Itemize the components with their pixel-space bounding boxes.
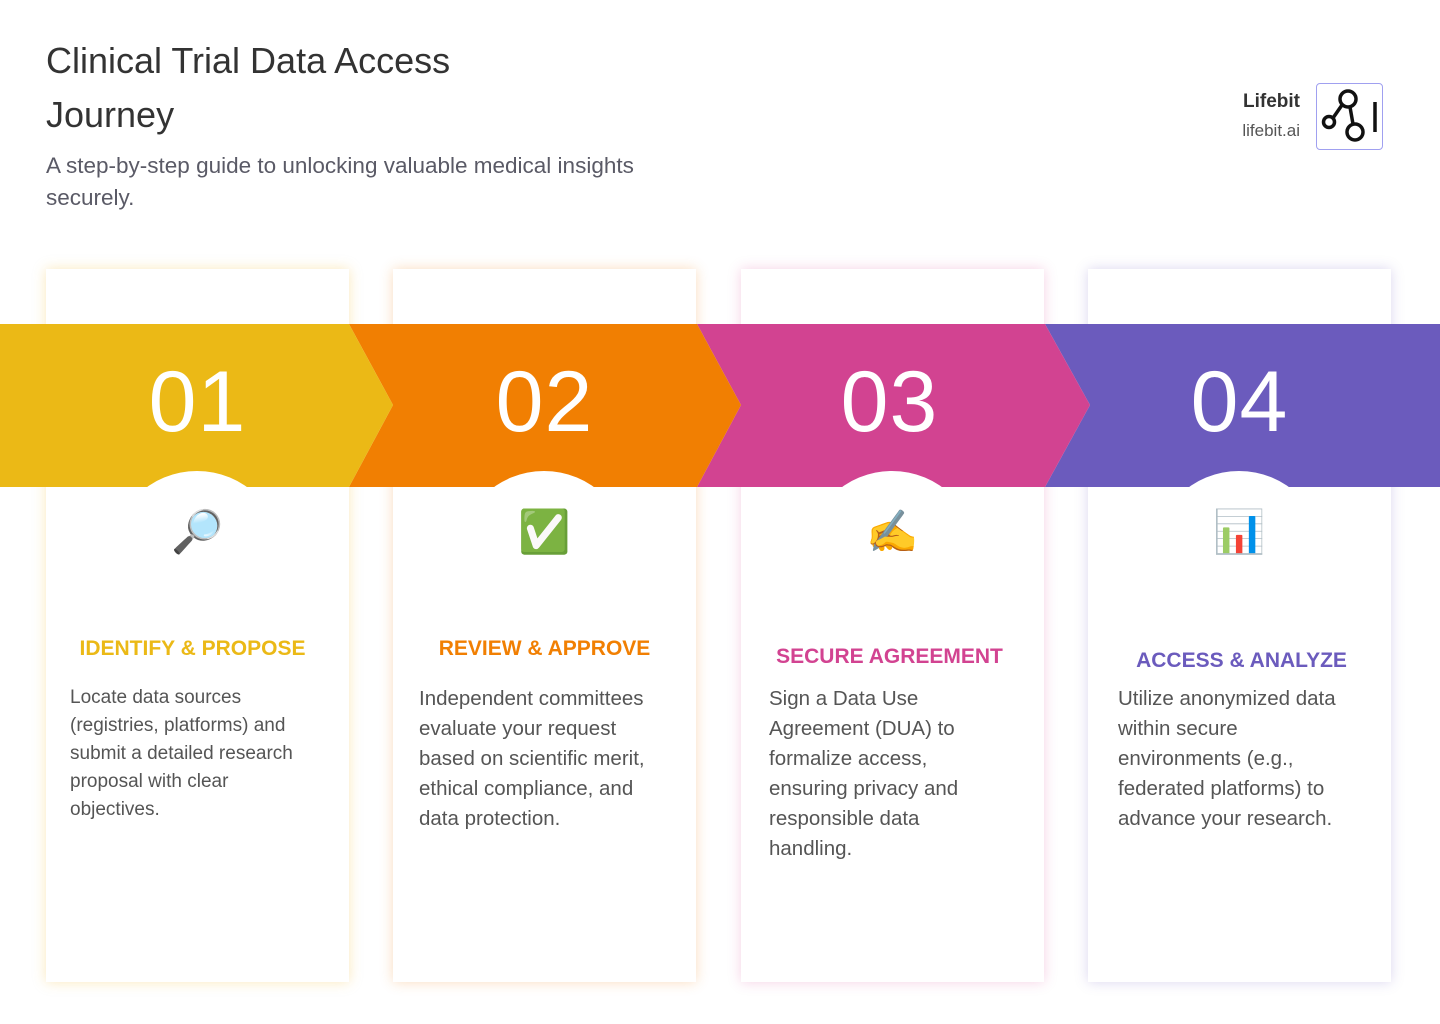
card 2 bbox=[393, 269, 696, 982]
card 4 bbox=[1088, 269, 1391, 982]
icon: magnifier: 🔎 bbox=[171, 508, 224, 557]
card 3 bbox=[741, 269, 1044, 982]
text: 02 bbox=[496, 354, 593, 450]
brand text: Lifebit bbox=[1243, 91, 1300, 112]
numbers: 01 bbox=[149, 354, 246, 450]
title: Clinical Trial Data Access Journey bbox=[46, 40, 450, 135]
icon: check: ✅ bbox=[518, 508, 571, 557]
heading 1: IDENTIFY & PROPOSE bbox=[80, 637, 306, 660]
text 3: Sign a Data Use Agreement (DUA) to formalize access, ensuring privacy and responsible data handling. bbox=[769, 687, 958, 860]
icon: bar chart: 📊 bbox=[1213, 508, 1266, 557]
text 2: Independent committees evaluate your request based on scientific merit, ethical compliance, and data protection. bbox=[419, 687, 645, 830]
circles bbox=[111, 471, 283, 643]
subtitle: A step-by-step guide to unlocking valuable medical insights securely. bbox=[46, 153, 634, 210]
brand text bbox=[1242, 91, 1300, 140]
text 1: Locate data sources (registries, platforms) and submit a detailed research proposal with clear objectives. bbox=[70, 687, 293, 820]
text 4: Utilize anonymized data within secure environments (e.g., federated platforms) to advance your research. bbox=[1118, 687, 1336, 830]
heading 3: SECURE AGREEMENT bbox=[776, 645, 1003, 668]
heading 2: REVIEW & APPROVE bbox=[439, 637, 650, 660]
icon: writing hand: ✍️ bbox=[866, 508, 919, 557]
banner arrows bbox=[0, 324, 1440, 487]
text: 04 bbox=[1191, 354, 1288, 450]
text: 03 bbox=[841, 354, 938, 450]
brand text: lifebit.ai bbox=[1242, 121, 1300, 140]
icon: logo bbox=[1316, 83, 1383, 150]
heading 4: ACCESS & ANALYZE bbox=[1136, 649, 1347, 672]
card 1 bbox=[46, 269, 349, 982]
